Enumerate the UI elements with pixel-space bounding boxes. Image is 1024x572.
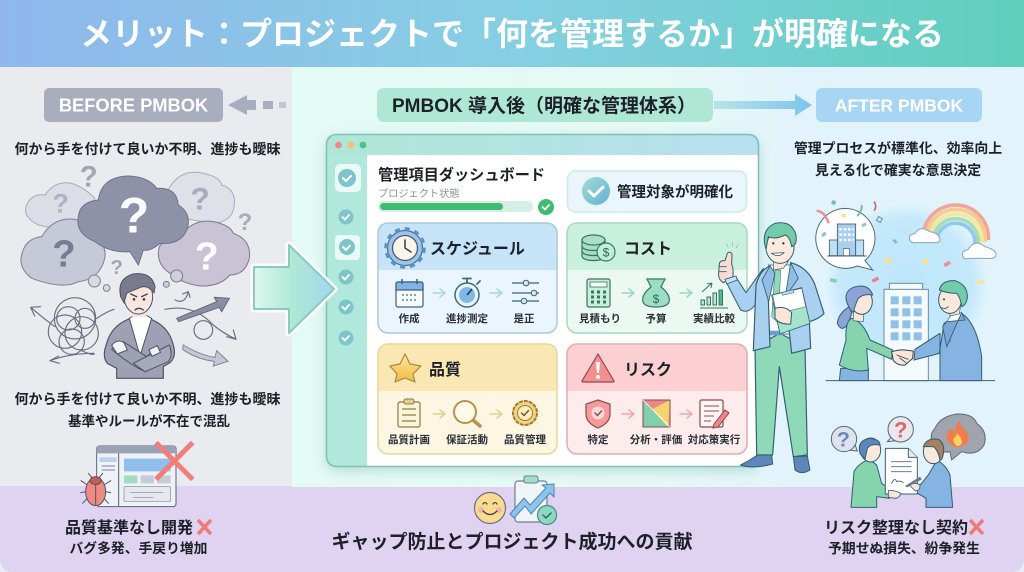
process steps: schedule: 是正 [514,313,535,325]
icon: star [390,354,421,382]
icon: warning triangle [582,354,614,382]
icon: shield [586,400,610,428]
center heading pill [377,88,713,122]
panel: after pmbok [794,88,1002,556]
icon: small cross [970,520,983,534]
before bottom text [14,391,280,429]
icon: money bag [643,279,669,307]
panel: risk: リスク [624,361,672,379]
man in blue suit [914,281,982,381]
panel: quality [378,344,557,454]
arrow: to after pmbok [714,94,812,116]
illustration: handshake scene [816,200,996,381]
icon: document and pencil [700,400,729,428]
process steps: risk: 特定 [588,433,609,446]
callout: management targets clear [568,171,746,212]
illustration: confused man with clouds: ? [238,209,252,236]
panel: success [331,476,693,553]
red question bubble [887,417,913,442]
after pmbok pill: AFTER PMBOK [835,96,964,116]
process steps: schedule: 進捗測定 [446,312,488,325]
tangled lines [31,292,236,363]
shirt and tie [767,265,792,334]
panel: schedule: スケジュール [430,240,525,258]
question bubble: ? [837,428,850,452]
process steps: risk [586,400,741,446]
jacket [753,266,770,351]
woman [837,286,893,381]
illustration: confused man with clouds: ? [195,234,219,278]
panel: risk [567,344,747,454]
illustration: presenter man [719,223,824,473]
illustration: confused man with clouds: ? [119,188,149,244]
icon: small cross [198,520,211,534]
before bottom text: 基準やルールが不在で混乱 [68,413,230,429]
illustration: confused man with clouds [21,161,252,378]
process steps: quality: 品質管理 [504,433,546,446]
illustration: confused man with clouds: ? [190,180,210,216]
callout: management targets clear: 管理対象が明確化 [617,183,733,201]
head [773,262,788,270]
illustration: confused man with clouds: ? [110,256,123,279]
process steps: cost [579,279,735,325]
hands and pen [888,477,922,498]
process steps: risk: 分析・評価 [630,433,683,446]
illustration: confused man with clouds: ? [80,161,98,194]
building speech bubble [816,208,875,270]
process steps: cost: 実績比較 [693,312,735,325]
process steps: quality: 保証活動 [446,433,488,446]
illustration: confused man with clouds: ? [53,189,69,219]
icon: bug [81,473,111,506]
fire cloud [931,414,985,460]
process steps: risk: 対応策実行 [688,433,741,446]
dashboard heading: 管理項目ダッシュボード [378,166,545,184]
clipboard [772,288,810,334]
caption: no risk review: リスク整理なし契約 [824,518,968,537]
icon: quality badge [513,401,537,425]
caption: no quality standard: 品質基準なし開発 [65,518,193,537]
contract document [885,448,917,494]
raised arm [726,268,763,311]
legs [755,333,807,457]
header banner [0,0,1024,67]
icon: rising bars [700,283,728,308]
process steps: cost: 見積もり [579,312,621,325]
caption: no risk review [824,518,983,556]
icon: red cross [156,443,193,479]
icon: smiley [474,492,506,524]
office tower [884,283,928,381]
icon: calendar [396,279,423,307]
big arrow [254,245,334,333]
caption: no risk review: 予期せぬ損失、紛争発生 [828,540,980,556]
after text [794,140,1002,178]
panel: cost: コスト [624,241,672,258]
illustration: bug and browser window [81,443,193,507]
illustration: contract dispute [831,414,985,507]
confetti [817,200,984,285]
before pmbok pill: BEFORE PMBOK [59,94,209,116]
panel: before pmbok [14,88,286,556]
sidebar [326,155,367,467]
arrow: back to before [228,95,286,115]
hand thumbs up [719,242,738,284]
panel: quality: 品質 [429,361,461,379]
success caption: ギャップ防止とプロジェクト成功への貢献 [331,530,693,553]
caption: no quality standard: バグ多発、手戻り増加 [70,540,207,556]
panel: dashboard window [326,134,759,467]
before bottom text: 何から手を付けて良いか不明、進捗も曖昧 [14,391,280,407]
man body [104,316,174,378]
process steps: schedule [396,278,539,325]
panel: cost [567,223,747,333]
icon: clipboard with rising arrow [510,476,556,524]
panel: schedule [378,223,557,333]
icon: gear clock [386,229,424,267]
right man [915,439,953,507]
left man [851,438,890,507]
process steps: quality: 品質計画 [388,433,430,446]
process steps: schedule: 作成 [398,312,420,325]
illustration: confused man with clouds: ? [52,233,76,276]
icon: calculator [587,279,610,307]
after text: 見える化で確実な意思決定 [815,162,981,178]
icon: checklist clipboard [398,399,420,427]
progress bar [378,199,554,215]
caption: no quality standard [65,518,211,556]
after pmbok pill [816,88,982,122]
bottom band [0,486,1024,572]
dashboard heading: プロジェクト状態 [378,187,460,200]
icon: risk matrix [643,400,670,427]
dashboard heading [378,166,554,215]
icon: magnifier [454,401,480,426]
icon: money bag: $ [653,292,660,306]
icon: stopwatch [455,278,480,307]
window title bar [326,134,759,155]
icon: coins: $ [603,246,610,260]
window outline [326,134,758,466]
process steps: cost: 予算 [646,312,666,325]
icon: coins [582,235,615,261]
handshake [892,350,913,365]
before pmbok pill [44,88,223,122]
icon: sliders [512,280,539,304]
process steps: quality [388,399,546,446]
before top text: 何から手を付けて良いか不明、進捗も曖昧 [14,141,280,157]
title: メリット：プロジェクトで「何を管理するか」が明確になる [80,16,944,52]
center heading pill: PMBOK 導入後（明確な管理体系） [392,94,696,117]
red question bubble: ? [894,417,907,442]
after text: 管理プロセスが標準化、効率向上 [794,140,1002,156]
question bubble [831,426,857,452]
rainbow [924,205,988,244]
